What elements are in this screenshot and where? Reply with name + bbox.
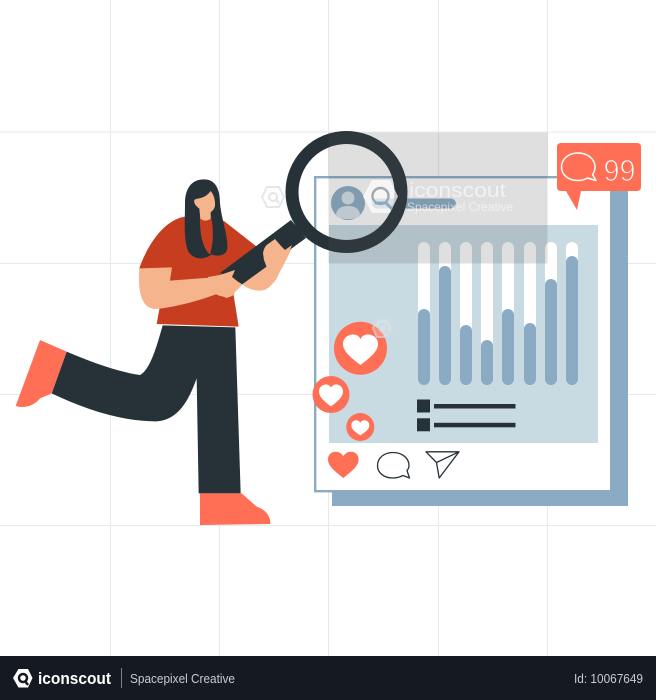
chart legend [417, 400, 516, 431]
panel: right frame strip [611, 191, 628, 490]
icon: notification badge 99: 99 [604, 153, 636, 188]
panel: social post card [315, 177, 611, 491]
footer logo [13, 669, 32, 688]
right arm [242, 246, 293, 290]
icon: like heart [328, 452, 359, 478]
rear shoe [16, 340, 67, 407]
shirt gap between hair strands [200, 215, 213, 255]
watermark: small logo lower [373, 319, 393, 337]
watermark: center logo [363, 180, 398, 213]
face [194, 191, 215, 221]
hand gripping arm end [208, 270, 242, 297]
watermark: brand text: iconscout [409, 180, 506, 202]
pants [52, 325, 241, 493]
icon: large heart bubble [334, 322, 387, 375]
footer bar [0, 656, 656, 700]
panel: back frame of social post [332, 191, 628, 506]
footer author: Spacepixel Creative [130, 671, 235, 686]
icon: comment bubble [378, 452, 410, 478]
hair [185, 179, 227, 258]
figure: woman holding magnifying glass [16, 179, 293, 525]
icon: medium heart bubble [312, 376, 350, 413]
footer id: Id: 10067649 [574, 671, 643, 686]
icon: send arrow [426, 452, 459, 478]
watermark: grey square [328, 132, 548, 264]
left arm [139, 267, 237, 309]
bar chart [418, 242, 578, 385]
watermark: small logo left [262, 187, 284, 207]
icon: small heart bubble [346, 413, 374, 441]
icon: profile avatar [331, 186, 365, 220]
watermark: author text: Spacepixel Creative [407, 200, 513, 214]
shirt [139, 217, 257, 327]
icon: notification badge 99 [557, 143, 641, 210]
footer brand name: iconscout [38, 669, 111, 688]
icon: magnifying glass [220, 138, 401, 284]
front shoe [200, 493, 270, 525]
panel: analytics chart background [329, 225, 598, 443]
hand gripping handle [242, 239, 292, 291]
profile name bar [372, 198, 456, 208]
